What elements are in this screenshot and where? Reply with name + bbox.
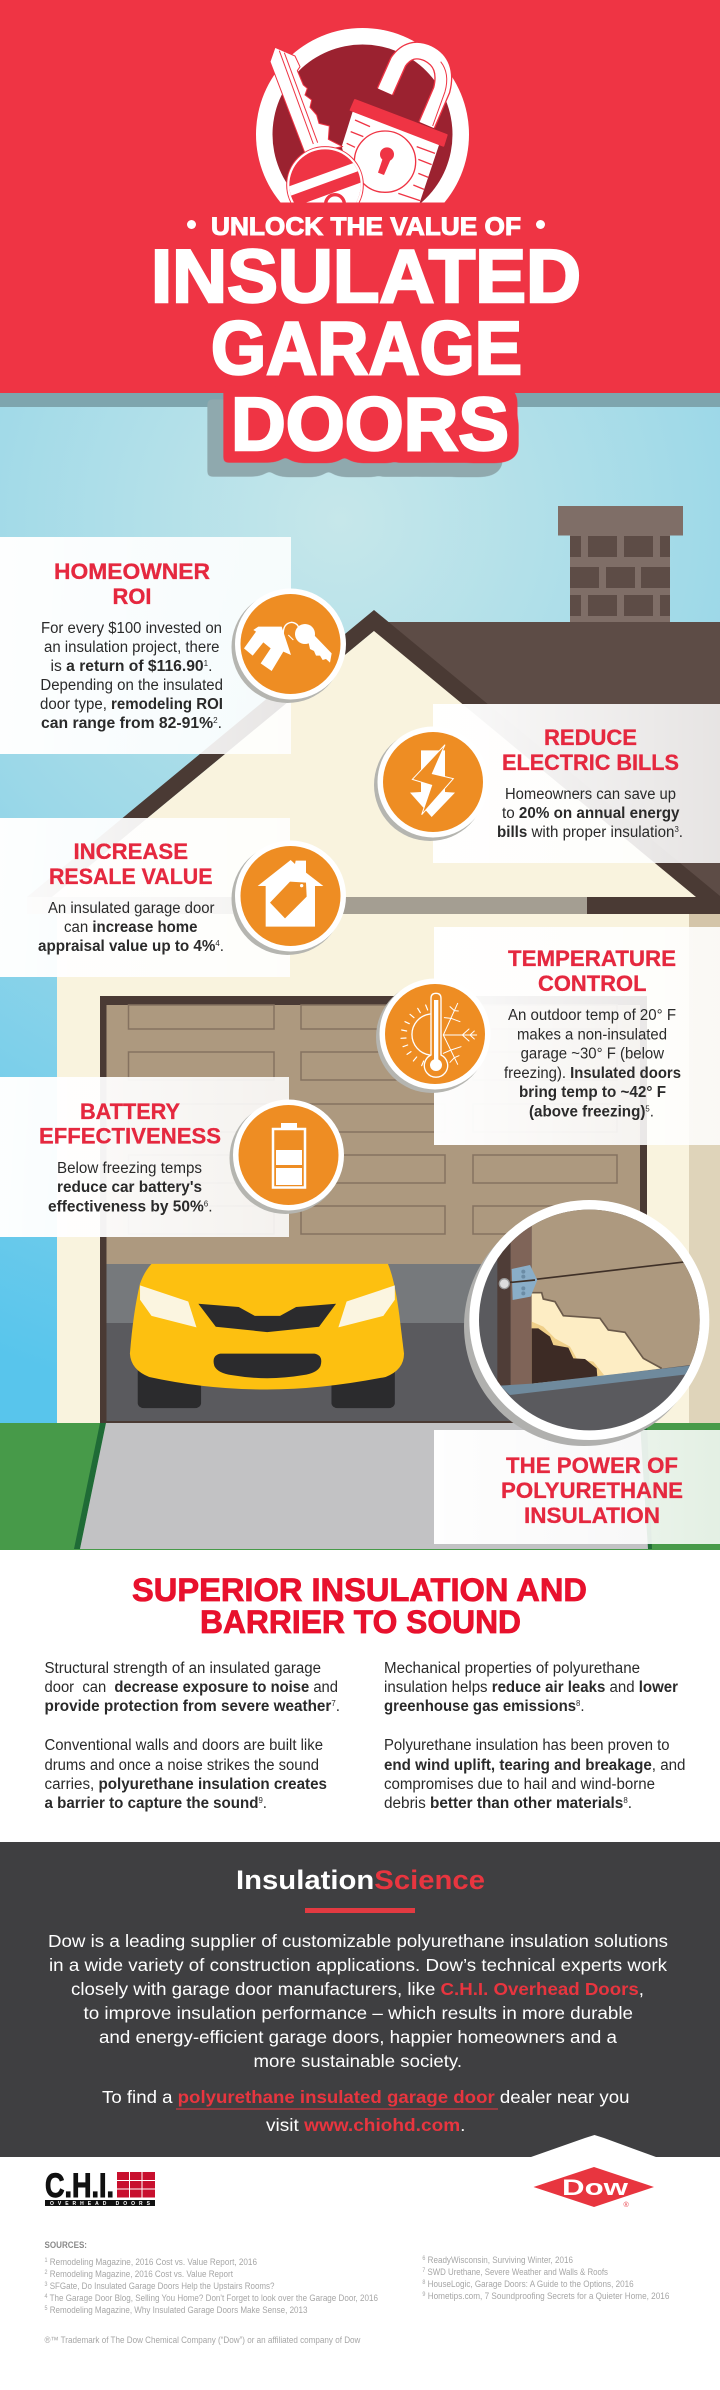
section: superior insulation <box>44 1572 686 1812</box>
sources: right column: ReadyWisconsin, Surviving Winter, 2016 <box>425 2255 573 2265</box>
header red panel <box>0 0 720 393</box>
sources: left column: 5 <box>44 2306 48 2312</box>
logo: Dow diamond <box>534 2167 654 2209</box>
text: right column: Mechanical properties of polyurethane <box>384 1660 640 1677</box>
house roof <box>27 610 720 914</box>
callout: polyurethane cutaway inset <box>464 1200 709 1446</box>
divider bar <box>305 1908 415 1913</box>
text: left column <box>44 1660 340 1812</box>
panel: homeowner ROI <box>0 537 291 754</box>
sources: right column: 6 <box>422 2256 426 2262</box>
icon: thermometer with sun and snowflake <box>376 978 490 1093</box>
text: left column: . <box>263 1795 267 1812</box>
sources: right column: SWD Urethane, Severe Weather and Walls & Roofs <box>425 2267 608 2277</box>
text: temperature control body: bring temp to ~42° F <box>519 1084 666 1101</box>
text: homeowner ROI body: . <box>208 658 212 675</box>
heading: homeowner ROI: HOMEOWNER <box>54 559 210 584</box>
sources: left column: Remodeling Magazine, 2016 Cost vs. Value Report <box>48 2269 233 2279</box>
sources: right column: 7 <box>422 2268 426 2274</box>
sources: left column: 2 <box>44 2270 48 2276</box>
icon: battery <box>230 1100 344 1214</box>
sources list: SOURCES: <box>44 2240 87 2251</box>
text: battery effectiveness body: effectiveness by 50% <box>48 1198 204 1216</box>
text: reduce electric bills body: to 20% on annual energy <box>502 805 680 822</box>
sources list <box>44 2240 669 2345</box>
text: temperature control body: freezing). Insulated doors <box>504 1065 681 1082</box>
text: temperature control body: 5 <box>645 1104 650 1114</box>
sources: right column: 9 <box>422 2292 426 2298</box>
sources: left column: Remodeling Magazine, Why Insulated Garage Doors Make Sense, 2013 <box>47 2305 307 2315</box>
icon: lightning bolt and down arrow <box>374 726 488 841</box>
text: temperature control body: . <box>650 1104 654 1120</box>
text: right column: . <box>580 1698 584 1715</box>
heading: garage: GARAGE <box>211 306 522 390</box>
garage door <box>106 1005 640 1264</box>
text: battery effectiveness body: reduce car battery's <box>57 1179 202 1196</box>
sources: left column: 4 <box>44 2294 48 2300</box>
text: homeowner ROI body <box>40 620 223 732</box>
text: increase resale value body: An insulated garage door <box>48 900 214 917</box>
heading: insulation science: Insulation Science <box>236 1865 485 1895</box>
text: reduce electric bills body: bills with proper insulation <box>497 824 678 841</box>
sources: right column: 8 <box>422 2280 426 2286</box>
text: increase resale value body: appraisal value up to 4% <box>38 938 216 955</box>
heading: homeowner ROI: ROI <box>112 584 152 609</box>
text: left column: carries, polyurethane insulation creates <box>44 1776 327 1793</box>
text: Dow description: more sustainable society. <box>254 2051 462 2071</box>
logo: C.H.I. Overhead Doors: C.H.I. <box>45 2167 114 2205</box>
text: homeowner ROI body: For every $100 invested on <box>41 620 222 637</box>
text: right column: . <box>628 1795 632 1812</box>
heading: reduce electric bills: REDUCE <box>544 725 637 750</box>
text: Dow description: in a wide variety of construction applications. Dow’s technical experts work <box>49 1955 667 1975</box>
text: left column: drums and once a noise strikes the sound <box>44 1757 319 1774</box>
heading: unlock the value of: UNLOCK THE VALUE OF <box>211 213 521 241</box>
garage opening <box>100 996 647 1423</box>
driveway <box>74 1423 652 1549</box>
heading: temperature control: TEMPERATURE <box>508 946 676 971</box>
text: reduce electric bills body <box>497 786 683 841</box>
sources: left column: 1 <box>44 2258 48 2264</box>
text: battery effectiveness body: 6 <box>204 1200 209 1208</box>
heading: battery effectiveness: EFFECTIVENESS <box>39 1124 221 1148</box>
text: right column: Polyurethane insulation has been proven to <box>384 1737 670 1754</box>
sources: right column: Hometips.com, 7 Soundproofing Secrets for a Quieter Home, 2016 <box>425 2291 669 2301</box>
text: temperature control body: An outdoor temp of 20° F <box>508 1007 676 1024</box>
heading: battery effectiveness <box>39 1099 221 1148</box>
house wall and gable <box>27 631 720 1424</box>
text: right column: greenhouse gas emissions <box>384 1698 576 1715</box>
text: dealer call to action: To find a polyurethane insulated garage door dealer near you <box>102 2087 630 2107</box>
text: homeowner ROI body: an insulation project, there <box>44 639 220 656</box>
text: left column: a barrier to capture the sound <box>44 1795 258 1812</box>
heading: the power of polyurethane insulation: THE POWER OF <box>506 1453 678 1478</box>
text: battery effectiveness body: . <box>208 1198 213 1216</box>
panel: temperature control <box>434 927 720 1145</box>
heading: increase resale value: INCREASE <box>74 839 188 864</box>
logo: Dow diamond: Dow <box>562 2175 629 2200</box>
text: homeowner ROI body: Depending on the insulated <box>40 677 223 694</box>
heading: reduce electric bills: ELECTRIC BILLS <box>502 750 679 775</box>
text: right column: debris better than other materials <box>384 1795 626 1812</box>
text: temperature control body: (above freezing) <box>529 1104 645 1120</box>
heading: battery effectiveness: BATTERY <box>80 1099 180 1124</box>
text: left column: 9 <box>258 1796 263 1805</box>
heading: the power of polyurethane insulation: POLYURETHANE <box>501 1478 683 1503</box>
sources: left column: Remodeling Magazine, 2016 Cost vs. Value Report, 2016 <box>48 2257 257 2267</box>
text: reduce electric bills body: 3 <box>674 825 679 834</box>
sources: right column <box>422 2255 669 2301</box>
text: right column: compromises due to hail and wind-borne <box>384 1776 655 1793</box>
heading: reduce electric bills <box>502 725 679 775</box>
text: left column: 7 <box>331 1699 336 1708</box>
chimney <box>558 506 683 625</box>
header shadow band <box>0 393 720 407</box>
text: increase resale value body <box>38 900 224 955</box>
trademark note: ®™ Trademark of The Dow Chemical Company (“Dow”) or an affiliated company of Dow <box>44 2335 361 2345</box>
sources: left column: 3 <box>44 2282 48 2288</box>
text: increase resale value body: 4 <box>215 939 220 948</box>
text: right column: 8 <box>576 1699 581 1708</box>
text: right column: end wind uplift, tearing and breakage, and <box>384 1757 686 1774</box>
text: right column: insulation helps reduce air leaks and lower <box>384 1679 678 1696</box>
text: Dow description: closely with garage door manufacturers, like C.H.I. Overhead Doors , <box>71 1979 644 1999</box>
heading: temperature control: CONTROL <box>538 971 647 996</box>
heading: superior insulation and barrier to sound: BARRIER TO SOUND <box>200 1604 521 1640</box>
text: homeowner ROI body: 1 <box>204 659 209 668</box>
heading: increase resale value: RESALE VALUE <box>49 864 212 889</box>
ground lawn <box>0 1423 720 1550</box>
panel: reduce electric bills <box>433 704 720 863</box>
text: battery effectiveness body <box>48 1160 213 1216</box>
text: left column: . <box>336 1698 340 1715</box>
text: Dow description: to improve insulation performance – which results in more durable <box>84 2003 633 2023</box>
heading: superior insulation and barrier to sound <box>132 1572 587 1640</box>
sources: left column: The Garage Door Blog, Selling You Home? Don't Forget to look over the Garage Door, 2016 <box>47 2293 378 2303</box>
text: temperature control body: makes a non-insulated <box>517 1026 667 1044</box>
sources: left column: SFGate, Do Insulated Garage Doors Help the Upstairs Rooms? <box>47 2281 274 2291</box>
logo: Dow diamond: ® <box>624 2201 630 2209</box>
heading: insulated: INSULATED <box>151 234 581 318</box>
text: temperature control body <box>504 1007 681 1120</box>
sources: right column: HouseLogic, Garage Doors: A Guide to the Options, 2016 <box>425 2279 634 2289</box>
heading: superior insulation and barrier to sound: SUPERIOR INSULATION AND <box>132 1572 587 1608</box>
text: homeowner ROI body: 2 <box>213 716 218 725</box>
text: left column: Conventional walls and doors are built like <box>44 1737 323 1754</box>
text: temperature control body: garage ~30° F (below <box>521 1046 665 1062</box>
icon: house with price tag <box>232 840 346 955</box>
icon: house and keys <box>232 588 346 703</box>
text: battery effectiveness body: Below freezing temps <box>57 1160 202 1177</box>
white notch behind Dow logo <box>531 2135 656 2157</box>
text: left column: provide protection from severe weather <box>44 1698 331 1715</box>
text: Dow description <box>48 1931 668 2071</box>
logo: C.H.I. Overhead Doors: OVERHEAD DOORS <box>50 2201 151 2207</box>
text: reduce electric bills body: Homeowners can save up <box>505 786 676 803</box>
heading: increase resale value <box>49 839 212 889</box>
text: homeowner ROI body: . <box>218 715 222 732</box>
icon: key and padlock emblem <box>256 28 469 202</box>
text: dealer call to action <box>102 2087 630 2135</box>
panel: increase resale value <box>0 818 290 977</box>
sky background <box>0 407 720 1427</box>
text: homeowner ROI body: door type, remodeling ROI <box>40 696 223 713</box>
text: Dow description: Dow is a leading supplier of customizable polyurethane insulation solutions <box>48 1931 668 1951</box>
yellow car <box>130 1264 404 1408</box>
panel: power of polyurethane <box>434 1430 720 1544</box>
text: homeowner ROI body: can range from 82-91% <box>41 715 213 732</box>
text: left column: Structural strength of an insulated garage <box>44 1660 321 1677</box>
section: insulation science dark panel <box>0 1842 720 2157</box>
text: increase resale value body: . <box>220 938 224 955</box>
text: left column: door can decrease exposure to noise and <box>44 1679 338 1696</box>
text: dealer call to action: visit www.chiohd.com . <box>266 2115 466 2135</box>
text: Dow description: and energy-efficient garage doors, happier homeowners and a <box>99 2027 617 2047</box>
text: right column: 8 <box>623 1796 628 1805</box>
text: right column <box>384 1660 686 1812</box>
text: reduce electric bills body: . <box>679 824 683 841</box>
heading: temperature control <box>508 946 676 996</box>
panel: battery effectiveness <box>0 1077 289 1237</box>
text: increase resale value body: can increase home <box>64 919 198 936</box>
heading: doors with red outline and shadow: DOORS <box>231 382 509 466</box>
text: homeowner ROI body: is a return of $116.90 <box>50 658 202 675</box>
heading: homeowner ROI <box>54 559 210 609</box>
sources: left column <box>44 2257 378 2315</box>
heading: the power of polyurethane insulation: INSULATION <box>524 1503 660 1528</box>
heading: the power of polyurethane insulation <box>501 1453 683 1528</box>
